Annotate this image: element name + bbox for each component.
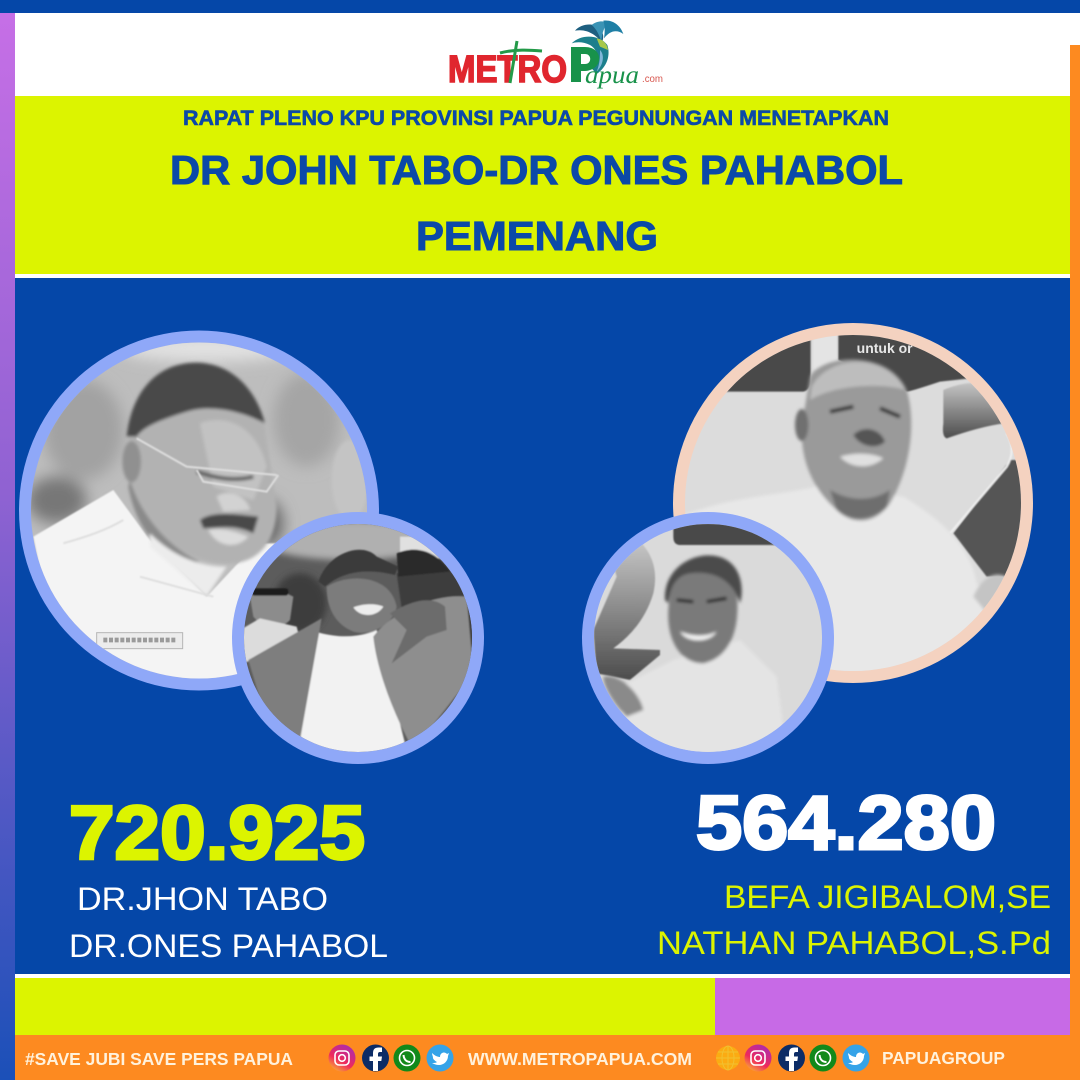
heading line: pemenang: PEMENANG: [416, 213, 658, 259]
website text: WWW.METROPAPUA.COM: [468, 1049, 692, 1069]
icon: globe: [716, 1046, 740, 1070]
sign text: untuk or: [857, 340, 913, 356]
logo .com: .com: [642, 74, 663, 85]
logo letter t accent: [500, 41, 542, 83]
logo letter P: [571, 47, 599, 82]
icon: facebook second: [778, 1044, 805, 1072]
dark sign panel left: [717, 330, 811, 392]
footer bar: [15, 1035, 1080, 1080]
photo: large left portrait: [17, 330, 383, 697]
logo crest: [572, 20, 623, 74]
photo: small right portrait: [582, 512, 834, 764]
right candidate name 2: NATHAN PAHABOL,S.Pd: [657, 925, 1051, 961]
hashtag text: #SAVE JUBI SAVE PERS PAPUA: [25, 1049, 293, 1069]
lime lower band: [15, 978, 715, 1035]
white divider above lower band: [15, 974, 1070, 978]
panel: headline band: [15, 96, 1070, 274]
photo: small left portrait: [232, 512, 484, 764]
icon: twitter second: [842, 1044, 870, 1072]
icon: instagram second: [744, 1044, 772, 1072]
icon: whatsapp: [394, 1044, 420, 1072]
right candidate name 1: BEFA JIGIBALOM,SE: [724, 879, 1051, 915]
photo: large right portrait: [670, 323, 1037, 690]
left gradient side bar: [0, 13, 15, 1080]
logo word apua: apua: [585, 62, 639, 89]
white masthead band: [0, 13, 1080, 97]
heading line: candidate names: DR JOHN TABO-DR ONES PAHABOL: [170, 147, 903, 193]
icon: instagram: [328, 1044, 356, 1072]
right candidate vote count: 564.280: [696, 781, 996, 866]
right orange side bar: [1070, 45, 1080, 1080]
heading line: rapat pleno: RAPAT PLENO KPU PROVINSI PAPUA PEGUNUNGAN MENETAPKAN: [183, 107, 889, 130]
brand text: PAPUAGROUP: [882, 1048, 1005, 1068]
icon: whatsapp second: [810, 1044, 836, 1072]
white divider under headline: [15, 274, 1070, 278]
left candidate name 2: DR.ONES PAHABOL: [69, 928, 388, 964]
logo: Metro Papua: [448, 20, 663, 91]
left candidate vote count: 720.925: [69, 791, 365, 876]
purple lower band: [715, 978, 1070, 1035]
dark sign panel right: [838, 330, 990, 392]
icon: twitter: [426, 1044, 454, 1072]
icon: facebook: [362, 1044, 389, 1072]
logo word METRO: METRO: [448, 49, 567, 91]
left candidate name 1: DR.JHON TABO: [77, 881, 328, 917]
